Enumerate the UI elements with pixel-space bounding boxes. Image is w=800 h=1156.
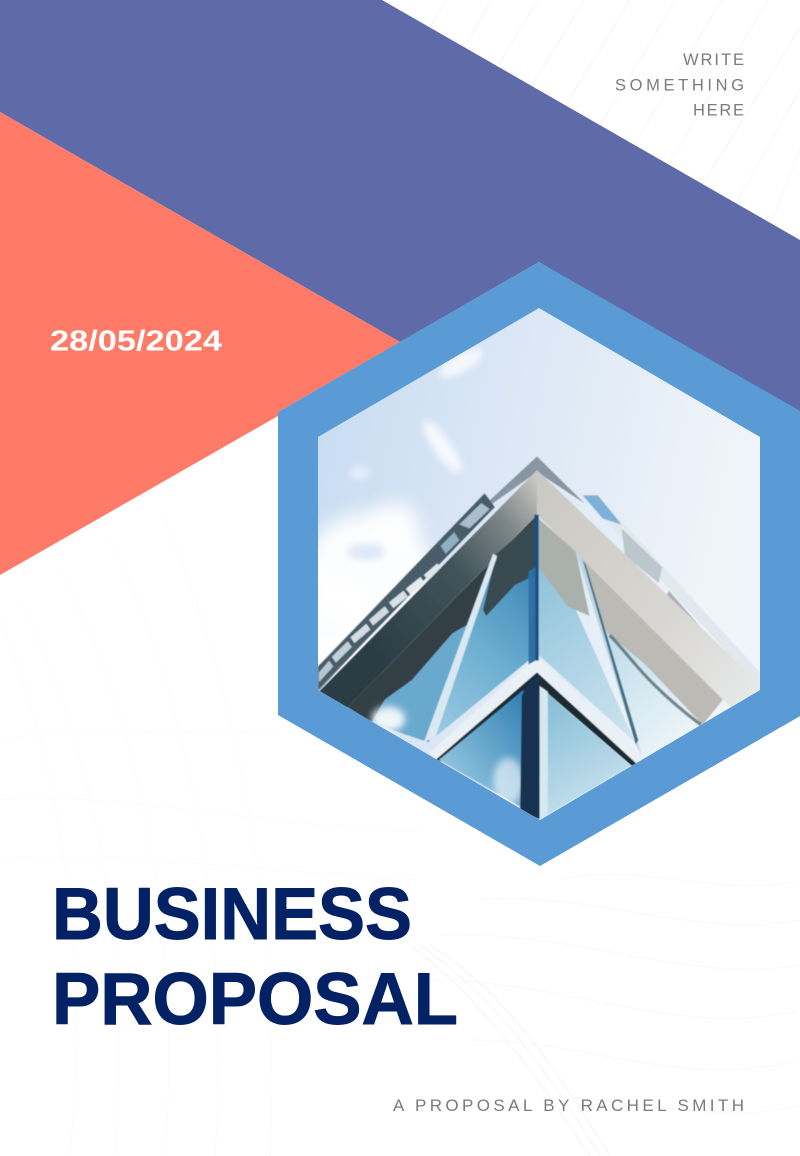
glass left inner [436,570,530,736]
roof edge [318,456,584,692]
top-right caption: WRITE [683,51,744,69]
top-right caption: HERE [693,102,744,120]
lower glass left [439,690,524,808]
top-right caption: SOMETHING [615,76,744,94]
window mullions [424,554,497,742]
top-right caption [615,51,744,120]
horizontal frame [429,656,643,764]
purple diagonal band [0,0,800,420]
date: 28/05/2024 [50,326,222,358]
glass right inner [539,567,635,742]
left balcony railing [318,493,495,690]
glass right outer [605,628,699,748]
title: PROPOSAL [52,959,458,1040]
title: BUSINESS [52,874,412,955]
dark upper window left [348,517,535,723]
hexagon photo: building [300,308,760,820]
title [52,874,458,1040]
lower glass right [539,686,631,819]
clouds [300,343,486,688]
right soffit band [537,470,760,709]
right balcony railing [583,495,760,688]
author line: A PROPOSAL BY RACHEL SMITH [393,1096,744,1115]
photo contents [318,456,760,819]
left soffit band [319,470,537,723]
glass left outer [372,625,467,743]
coral triangle [0,112,400,575]
central vertical column [534,515,539,661]
blue hexagon frame [278,262,800,866]
